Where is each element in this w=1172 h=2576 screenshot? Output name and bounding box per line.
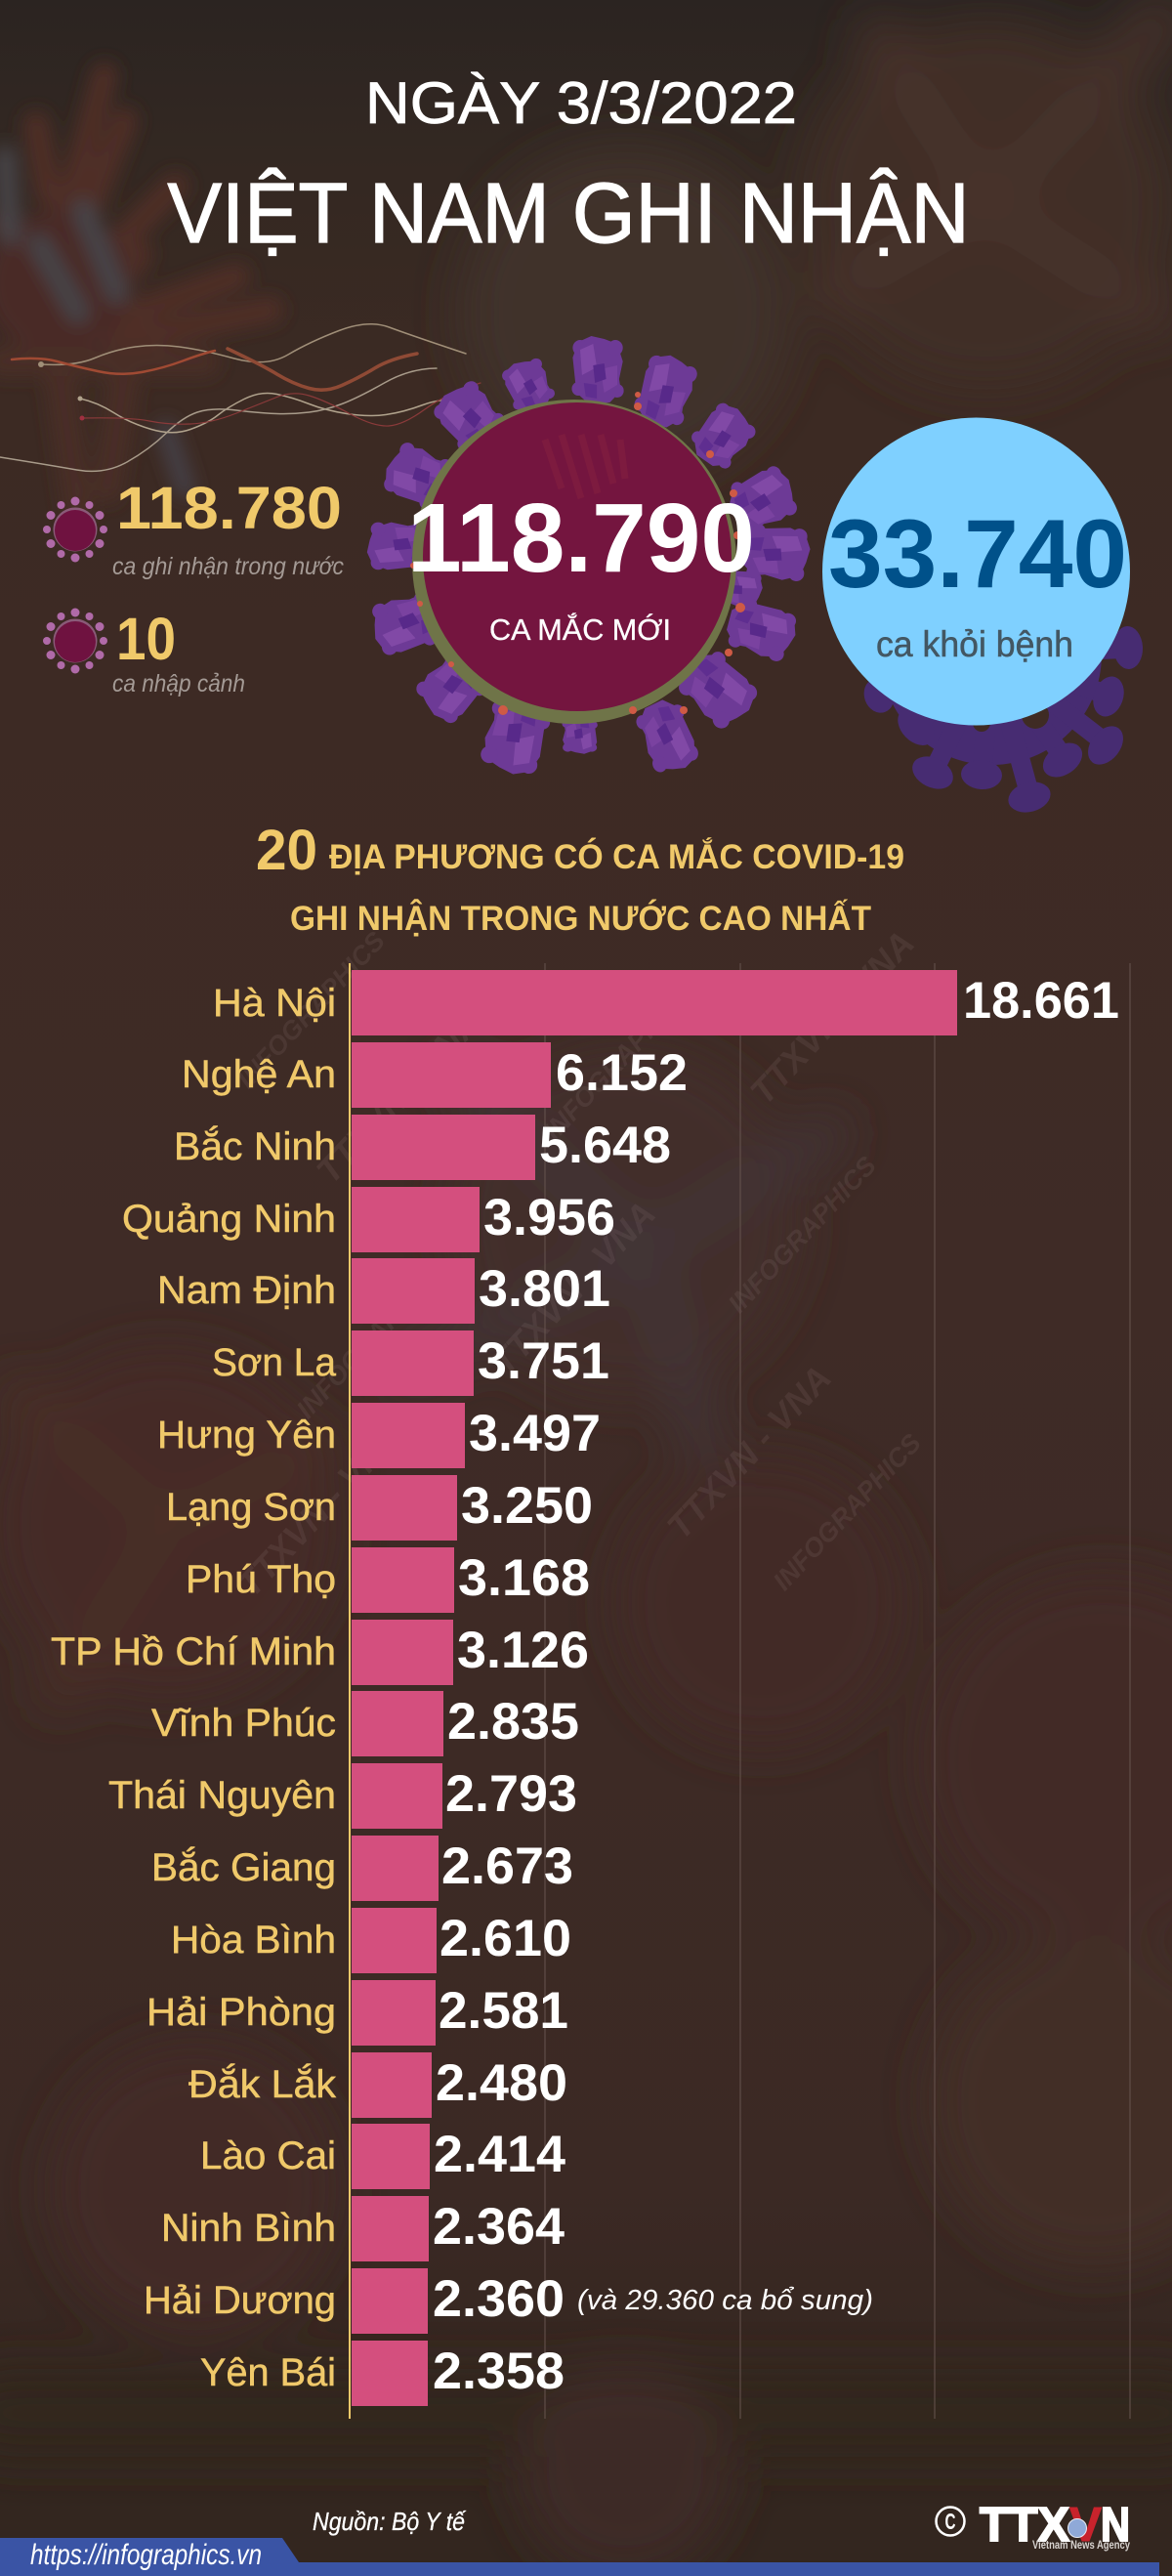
bar: Hòa Bình <box>171 1908 571 1973</box>
bar: TP Hồ Chí Minh: 3.126 <box>457 1622 589 1679</box>
chart heading: ĐỊA PHƯƠNG CÓ CA MẮC COVID-19 <box>329 837 904 876</box>
body texture <box>545 435 625 498</box>
bar chart <box>51 963 1130 2419</box>
source: Nguồn: Bộ Y tế <box>313 2507 466 2536</box>
bar: Thái Nguyên: 2.793 <box>445 1765 577 1823</box>
bar: Bắc Giang: 2.673 <box>441 1837 573 1895</box>
watermarks: INFOGRAPHICS <box>723 1151 882 1319</box>
bar: Bắc Ninh: 5.648 <box>539 1117 671 1174</box>
bar: TP Hồ Chí Minh <box>51 1620 589 1685</box>
bar: Phú Thọ: 3.168 <box>458 1549 590 1607</box>
orange dots <box>410 392 745 715</box>
bar: Lào Cai <box>200 2124 566 2189</box>
bar: Nghệ An <box>182 1042 688 1108</box>
bar: Ninh Bình <box>161 2196 565 2261</box>
virus illustration with new cases <box>366 336 812 781</box>
bar: Ninh Bình: Ninh Bình <box>161 2207 336 2250</box>
bar: Lạng Sơn: 3.250 <box>461 1477 593 1535</box>
bar: Hải Dương <box>144 2268 873 2334</box>
bar: Lạng Sơn: Lạng Sơn <box>166 1486 336 1529</box>
bar: Nam Định <box>157 1258 610 1324</box>
bar: Hà Nội <box>213 970 1119 1035</box>
bar: Sơn La: 3.751 <box>478 1332 609 1390</box>
chart heading: GHI NHẬN TRONG NƯỚC CAO NHẤT <box>290 899 871 938</box>
bar: Đắk Lắk: Đắk Lắk <box>188 2062 337 2106</box>
logo: TTXVN <box>936 2499 1130 2552</box>
bar: Bắc Giang: Bắc Giang <box>151 1845 336 1889</box>
stat: domestic cases <box>43 475 344 580</box>
bar: Nghệ An: 6.152 <box>556 1044 688 1102</box>
bar: Hải Dương: 2.360 <box>433 2270 565 2328</box>
bar: Phú Thọ: Phú Thọ <box>186 1558 336 1601</box>
watermarks: INFOGRAPHICS <box>291 1256 450 1424</box>
bar: Hưng Yên: Hưng Yên <box>157 1414 336 1457</box>
label: imported: ca nhập cảnh <box>112 670 245 697</box>
label: recovered: ca khỏi bệnh <box>876 624 1073 664</box>
bar: Sơn La <box>212 1330 609 1396</box>
bar: Phú Thọ <box>186 1547 590 1613</box>
bar: Hưng Yên: 3.497 <box>469 1405 601 1462</box>
number: recovered: 33.740 <box>828 499 1127 608</box>
recovered circle <box>822 418 1130 725</box>
bar: Vĩnh Phúc: 2.835 <box>447 1693 579 1751</box>
footer band <box>0 2538 1159 2576</box>
logo: TTXVN: Vietnam News Agency <box>1032 2540 1130 2552</box>
watermarks: TTXVN - VNA <box>309 1002 488 1191</box>
bar: Hải Phòng: 2.581 <box>439 1982 568 2040</box>
bar: Bắc Giang <box>151 1836 573 1901</box>
watermarks: TTXVN - VNA <box>742 923 922 1112</box>
watermarks <box>230 923 927 1604</box>
bar: Hải Phòng: Hải Phòng <box>146 1991 336 2034</box>
icon: small virus <box>43 608 107 674</box>
bar: Yên Bái <box>200 2341 565 2406</box>
bar: Nam Định: Nam Định <box>157 1269 336 1312</box>
bar: Hà Nội: 18.661 <box>963 972 1119 1030</box>
logo: TTXVN: TTX <box>980 2499 1069 2552</box>
bar: Hà Nội: Hà Nội <box>213 982 336 1025</box>
watermarks: TTXVN - VNA <box>483 1194 663 1382</box>
logo: TTXVN: N <box>1101 2499 1130 2552</box>
bar: Lào Cai: Lào Cai <box>200 2134 336 2177</box>
bar: Hưng Yên <box>157 1403 601 1468</box>
bar: Lạng Sơn <box>166 1475 593 1541</box>
bar: Ninh Bình: 2.364 <box>433 2198 565 2256</box>
bar: Yên Bái: 2.358 <box>433 2343 565 2400</box>
bar: Vĩnh Phúc: Vĩnh Phúc <box>151 1702 336 1745</box>
watermarks: INFOGRAPHICS <box>768 1428 927 1596</box>
bar: Nghệ An: Nghệ An <box>182 1053 336 1096</box>
footer url: https://infographics.vn <box>30 2539 262 2571</box>
bar: Yên Bái: Yên Bái <box>200 2351 336 2394</box>
chart heading: 20 <box>256 819 317 882</box>
bar: Hải Phòng <box>146 1980 568 2046</box>
bar: Nam Định: 3.801 <box>479 1260 610 1318</box>
bar: TP Hồ Chí Minh: TP Hồ Chí Minh <box>51 1630 336 1673</box>
bar: Thái Nguyên: Thái Nguyên <box>108 1774 336 1817</box>
title: main: VIỆT NAM GHI NHẬN <box>168 166 969 261</box>
virus spikes <box>366 336 812 781</box>
bar: Quảng Ninh <box>122 1187 615 1252</box>
watermarks: TTXVN - VNA <box>230 1415 409 1604</box>
bar: Sơn La: Sơn La <box>212 1341 337 1384</box>
chart heading <box>256 819 904 938</box>
bar: Hải Dương: (và 29.360 ca bổ sung) <box>577 2285 873 2316</box>
decorative wave lines <box>0 324 481 471</box>
virus body <box>423 402 732 711</box>
watermarks: INFOGRAPHICS <box>231 926 391 1094</box>
bar: Hòa Bình: Hòa Bình <box>171 1919 336 1962</box>
bar: Bắc Ninh <box>174 1115 671 1180</box>
label: domestic: ca ghi nhận trong nước <box>112 553 344 580</box>
number: imported: 10 <box>116 606 176 672</box>
bar: Lào Cai: 2.414 <box>434 2126 566 2183</box>
icon: small virus <box>43 496 107 563</box>
title: date: NGÀY 3/3/2022 <box>365 70 797 136</box>
bar: Đắk Lắk: 2.480 <box>436 2054 567 2112</box>
number: new cases: 118.790 <box>407 484 755 593</box>
watermarks: TTXVN - VNA <box>659 1358 839 1546</box>
number: domestic: 118.780 <box>116 475 342 541</box>
bar: Đắk Lắk <box>188 2052 567 2118</box>
virus ring <box>412 400 736 724</box>
watermarks: INFOGRAPHICS <box>538 978 697 1146</box>
label: new cases: CA MẮC MỚI <box>489 612 671 647</box>
bar: Bắc Ninh: Bắc Ninh <box>174 1124 336 1168</box>
bar: Quảng Ninh: Quảng Ninh <box>122 1198 336 1241</box>
bar: Thái Nguyên <box>108 1763 577 1829</box>
logo: TTXVN: V <box>1069 2499 1102 2552</box>
logo: TTXVN: C <box>945 2509 955 2534</box>
recovered cases <box>822 418 1144 817</box>
icon: purple virus <box>859 544 1144 817</box>
bar: Hòa Bình: 2.610 <box>440 1910 571 1967</box>
bar: Hải Dương: Hải Dương <box>144 2279 336 2322</box>
bar: Quảng Ninh: 3.956 <box>483 1189 615 1246</box>
stat: imported cases <box>43 606 245 697</box>
bar: Vĩnh Phúc <box>151 1691 579 1756</box>
